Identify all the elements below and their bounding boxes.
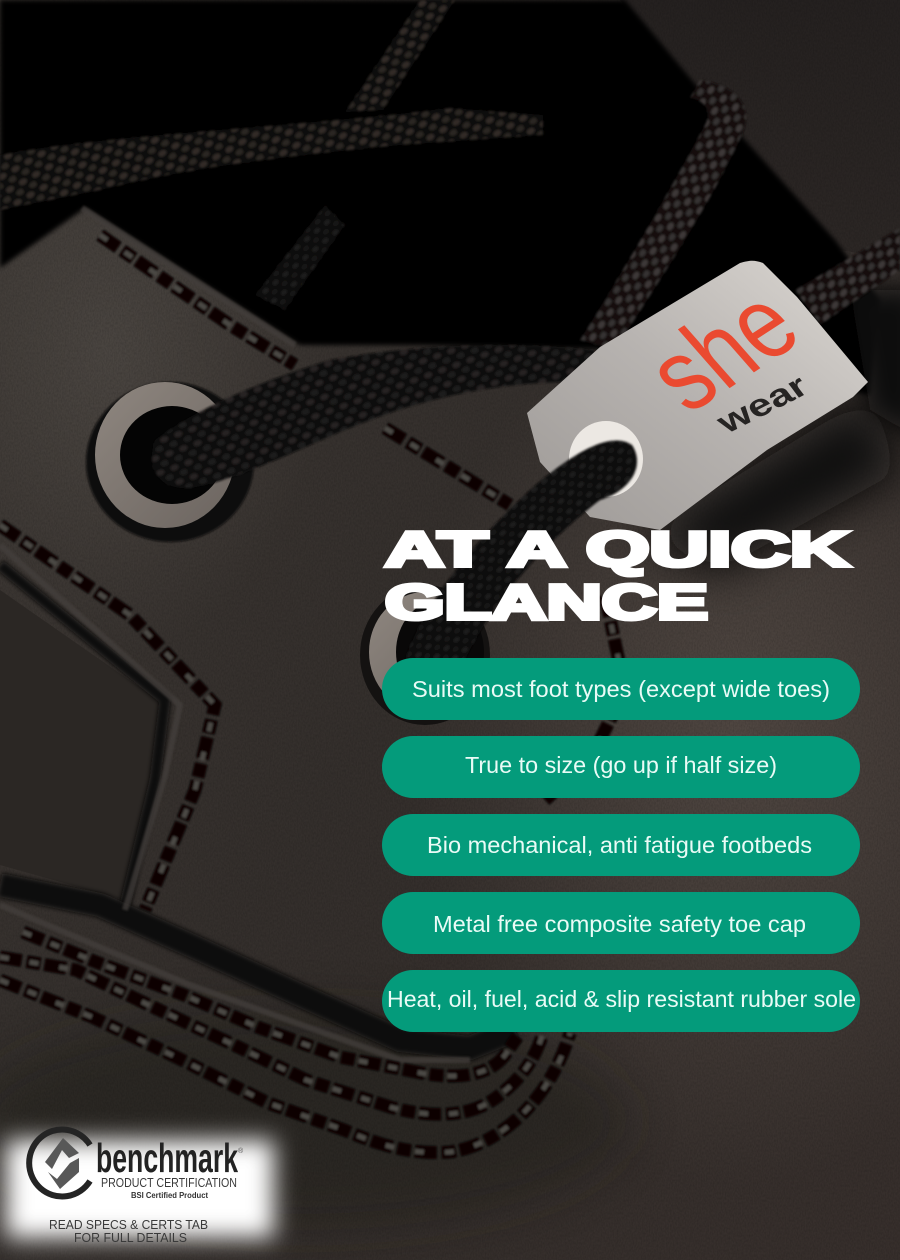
eyelet: upper [86, 382, 254, 542]
laces [0, 0, 900, 488]
registered mark: ® [238, 1147, 244, 1155]
pill: sole: Heat, oil, fuel, acid & slip resistant rubber sole [387, 986, 856, 1012]
heading [385, 523, 849, 630]
feature pills [382, 658, 860, 1032]
logo word: benchmark: benchmark [96, 1135, 238, 1181]
pill: toe cap: Metal free composite safety toe cap [433, 911, 806, 937]
eyelet: lower [360, 585, 490, 725]
pill: footbeds [382, 814, 860, 876]
lace: faded top centre [345, 0, 455, 112]
certification glow panel [6, 1140, 274, 1238]
pill: sole [382, 970, 860, 1032]
left inset leather panel [0, 590, 165, 900]
dark seam band: inset panel [0, 565, 165, 905]
lace: upper right loop [580, 80, 746, 350]
shadow right of tag [850, 290, 900, 440]
pill: toe cap [382, 892, 860, 954]
heading line 2: GLANCE [385, 576, 708, 630]
lace: right end [795, 228, 900, 325]
heading line 1: AT A QUICK [385, 523, 849, 577]
dark seam band: lower [0, 885, 515, 1048]
pill: foot types [382, 658, 860, 720]
lace: top horizontal [0, 108, 543, 210]
lace tag: she wear [527, 261, 868, 530]
lace: through tag hole [405, 441, 637, 681]
pill: footbeds: Bio mechanical, anti fatigue footbeds [427, 832, 812, 858]
shadow under tag [640, 395, 900, 570]
icon: benchmark logo [29, 1130, 90, 1196]
product certification label: PRODUCT CERTIFICATION [101, 1176, 237, 1190]
pill: sizing: True to size (go up if half size) [465, 752, 777, 778]
boot tongue dark area [0, 0, 880, 395]
BSI label: BSI Certified Product [131, 1191, 208, 1200]
benchmark certification block [29, 1130, 244, 1245]
tag hole rim [569, 421, 643, 497]
pill: foot types: Suits most foot types (except wide toes) [412, 676, 830, 702]
stitching lines [0, 235, 625, 1153]
pill: sizing [382, 736, 860, 798]
logo word: she: she [623, 265, 821, 432]
logo word: wear: wear [708, 368, 815, 440]
note line 1: READ SPECS & CERTS TAB [49, 1218, 208, 1232]
lace: main through eyelet [152, 345, 595, 488]
lace: faded inside tongue [255, 205, 345, 310]
leather edge highlights [0, 208, 470, 1060]
note line 2: FOR FULL DETAILS [74, 1231, 187, 1245]
